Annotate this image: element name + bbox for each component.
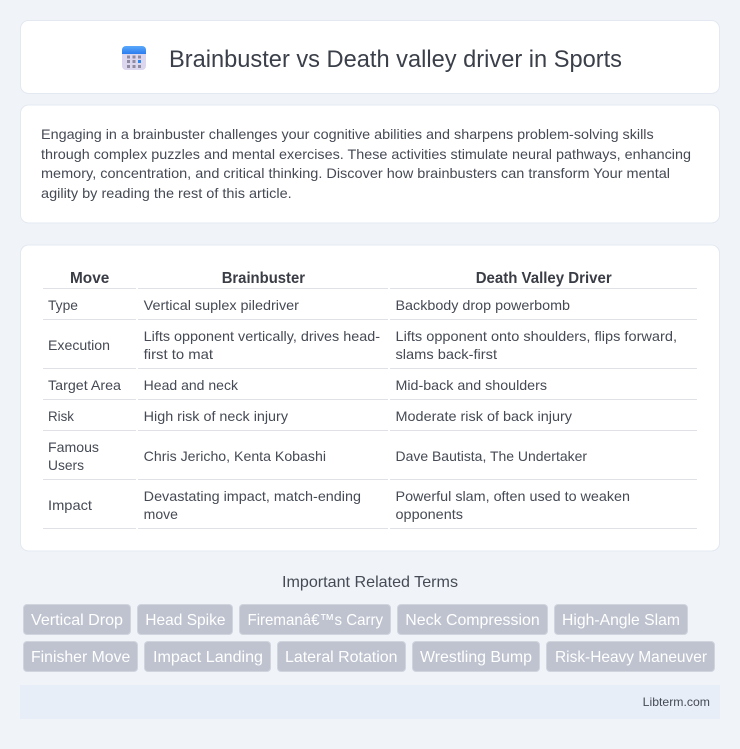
tag: wrestling bump xyxy=(412,642,540,672)
row: impact: Impact xyxy=(48,497,92,513)
row: impact: Devastating impact, match-ending xyxy=(144,488,361,504)
intro text block: memory, concentration, and critical thinking. Discover how brainbusters can transform Your mental xyxy=(41,165,670,181)
tag: risk-heavy maneuver: Risk-Heavy Maneuver xyxy=(555,649,708,666)
intro text block: through complex puzzles and mental exercises. These activities stimulate neural pathways, enhancing xyxy=(41,146,691,162)
row: famous users xyxy=(43,439,697,480)
row: risk xyxy=(43,408,697,431)
intro text block: Engaging in a brainbuster challenges your cognitive abilities and sharpens problem-solving skills xyxy=(41,126,654,142)
row: execution: first to mat xyxy=(144,346,213,362)
row: impact xyxy=(43,488,697,529)
row: execution: Lifts opponent onto shoulders, flips forward, xyxy=(396,328,677,344)
tag: fireman's carry: Firemanâ€™s Carry xyxy=(248,612,383,629)
tag: fireman's carry xyxy=(240,604,390,634)
header panel xyxy=(20,20,720,94)
panel: comparison table xyxy=(20,245,720,551)
row: risk: Moderate risk of back injury xyxy=(396,408,572,424)
row: execution xyxy=(43,328,697,369)
row: target area xyxy=(43,377,697,400)
row: target area: Target Area xyxy=(48,377,121,393)
row: famous users: Users xyxy=(48,457,84,473)
row: risk: High risk of neck injury xyxy=(144,408,288,424)
panel: intro paragraph xyxy=(20,105,720,223)
tag: head spike: Head Spike xyxy=(145,612,226,629)
row: famous users: Famous xyxy=(48,439,99,455)
tag: impact landing xyxy=(144,642,270,672)
tag: wrestling bump: Wrestling Bump xyxy=(420,649,532,666)
tag: finisher move xyxy=(24,642,138,672)
row: famous users: Dave Bautista, The Undertaker xyxy=(396,448,587,464)
row: execution: Lifts opponent vertically, drives head- xyxy=(144,328,380,344)
row: type: Vertical suplex piledriver xyxy=(144,297,299,313)
row: impact: Powerful slam, often used to weaken xyxy=(396,488,630,504)
related term tags xyxy=(24,604,714,672)
tag: vertical drop xyxy=(24,604,130,634)
table header row: Brainbuster xyxy=(222,270,305,287)
table header row xyxy=(43,270,697,289)
row: impact: opponents xyxy=(396,506,463,522)
tag: head spike xyxy=(138,604,232,634)
tag: impact landing: Impact Landing xyxy=(153,649,263,666)
tag: finisher move: Finisher Move xyxy=(31,649,130,666)
row: impact: move xyxy=(144,506,178,522)
row: target area: Head and neck xyxy=(144,377,239,393)
tag: neck compression xyxy=(398,604,548,634)
footer credit: Libterm.com xyxy=(643,695,710,709)
row: type xyxy=(43,297,697,320)
row: famous users: Chris Jericho, Kenta Kobashi xyxy=(144,448,326,464)
intro text block xyxy=(41,126,691,201)
table header row: Death Valley Driver xyxy=(476,270,612,287)
table header row: Move xyxy=(70,270,109,287)
tag: high-angle slam: High-Angle Slam xyxy=(562,612,680,629)
title: Brainbuster vs Death valley driver in Sports xyxy=(169,46,622,73)
heading: important related terms: Important Related Terms xyxy=(282,574,458,591)
tag: vertical drop: Vertical Drop xyxy=(31,612,123,629)
tag: lateral rotation: Lateral Rotation xyxy=(285,649,398,666)
icon: calendar xyxy=(122,46,146,70)
row: type: Backbody drop powerbomb xyxy=(396,297,570,313)
tag: neck compression: Neck Compression xyxy=(405,612,540,629)
row: execution: slams back-first xyxy=(396,346,497,362)
row: risk: Risk xyxy=(48,408,75,424)
row: type: Type xyxy=(48,297,78,313)
intro text block: agility by reading the rest of this article. xyxy=(41,185,292,201)
row: execution: Execution xyxy=(48,337,110,353)
tag: risk-heavy maneuver xyxy=(546,642,714,672)
footer bar xyxy=(20,685,720,719)
row: target area: Mid-back and shoulders xyxy=(396,377,547,393)
tag: high-angle slam xyxy=(554,604,688,634)
tag: lateral rotation xyxy=(278,642,406,672)
